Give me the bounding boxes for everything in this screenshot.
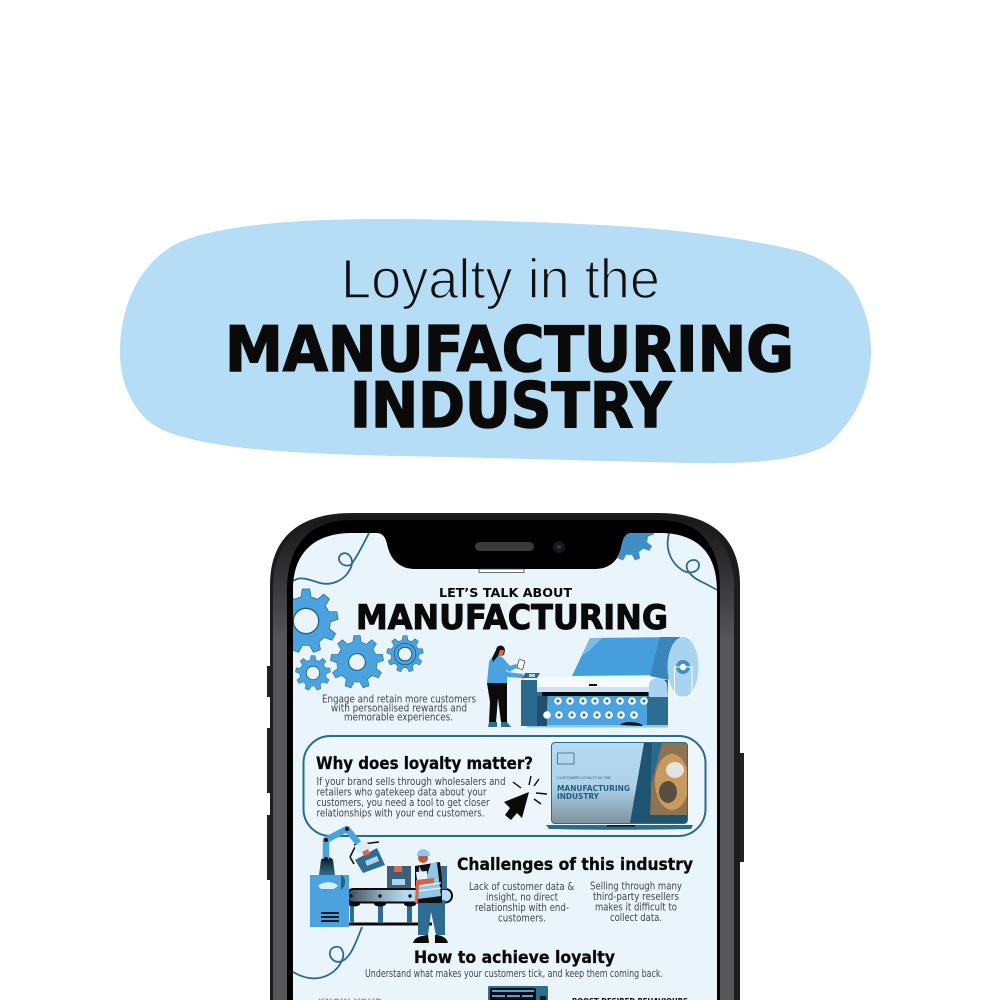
- gear: ringed: [387, 636, 423, 672]
- heading: [358, 588, 666, 630]
- body text: why loyalty matters: customers, you need a tool to get closer: [316, 798, 490, 809]
- body text: why loyalty matters: relationships with your end customers.: [316, 808, 484, 820]
- text: challenge two: makes it difficult to: [595, 902, 677, 914]
- gear: large: [293, 588, 338, 653]
- text: challenge one: [469, 882, 574, 924]
- intro text: with personalised rewards and: [331, 704, 467, 714]
- phone screen: [274, 511, 717, 1000]
- title: MANUFACTURING: [225, 313, 794, 386]
- body text: why loyalty matters: [316, 777, 506, 820]
- text: challenge two: collect data.: [610, 913, 662, 924]
- gear: small: [296, 656, 330, 690]
- decorative swirl: top right: [668, 533, 717, 590]
- decorative swirl: bottom left: [293, 927, 362, 978]
- heading: challenges: Challenges of this industry: [457, 855, 693, 875]
- panel: why does loyalty matter: [304, 736, 706, 836]
- title: INDUSTRY: [350, 369, 672, 442]
- heading: MANUFACTURING: [356, 598, 668, 638]
- text: challenge one: Lack of customer data &: [469, 882, 574, 893]
- text: challenge two: Selling through many: [590, 882, 682, 892]
- heading: how to achieve loyalty: How to achieve loyalty: [414, 948, 615, 968]
- gear: top right: [618, 533, 654, 560]
- illustration: laptop with report cover: [546, 742, 693, 830]
- decorative swirl: top left: [293, 533, 369, 584]
- illustration: worker with tablet: [487, 646, 525, 727]
- intro text: memorable experiences.: [344, 712, 453, 724]
- phone side buttons: [267, 666, 744, 880]
- illustration: factory worker: [413, 849, 448, 943]
- illustration: printing machine: [521, 637, 698, 728]
- intro text: Engage and retain more customers: [322, 694, 476, 706]
- heading: LET’S TALK ABOUT: [439, 586, 573, 600]
- body text: why loyalty matters: retailers who gatekeep data about your: [316, 788, 487, 798]
- title: Loyalty in the: [341, 247, 660, 310]
- body text: why loyalty matters: If your brand sells through wholesalers and: [316, 777, 506, 788]
- title: [225, 247, 794, 442]
- text: challenge one: insight, no direct: [486, 892, 558, 904]
- gear: medium: [330, 636, 384, 688]
- illustration: laptop with report cover: MANUFACTURING: [557, 784, 630, 793]
- illustration: robot arm and conveyor: [310, 827, 452, 927]
- text: challenge two: [590, 882, 682, 924]
- text: challenge one: customers.: [498, 914, 546, 924]
- text: how to achieve loyalty: Understand what makes your customers tick, and keep them coming back.: [365, 969, 663, 980]
- phone frame: [270, 513, 740, 1000]
- illustration: laptop with report cover: INDUSTRY: [557, 792, 600, 801]
- text: challenge one: relationship with end-: [475, 903, 569, 914]
- icon: mouse cursor: [504, 776, 547, 820]
- illustration: laptop with report cover: CUSTOMER LOYALTY IN THE: [557, 776, 611, 780]
- text: challenge two: third-party resellers: [593, 892, 679, 903]
- phone notch details: [475, 541, 565, 572]
- title background blob: [120, 219, 871, 463]
- intro text: [322, 694, 476, 724]
- illustration: control panel: [488, 986, 548, 1000]
- heading: why loyalty matters: Why does loyalty matter?: [316, 754, 533, 774]
